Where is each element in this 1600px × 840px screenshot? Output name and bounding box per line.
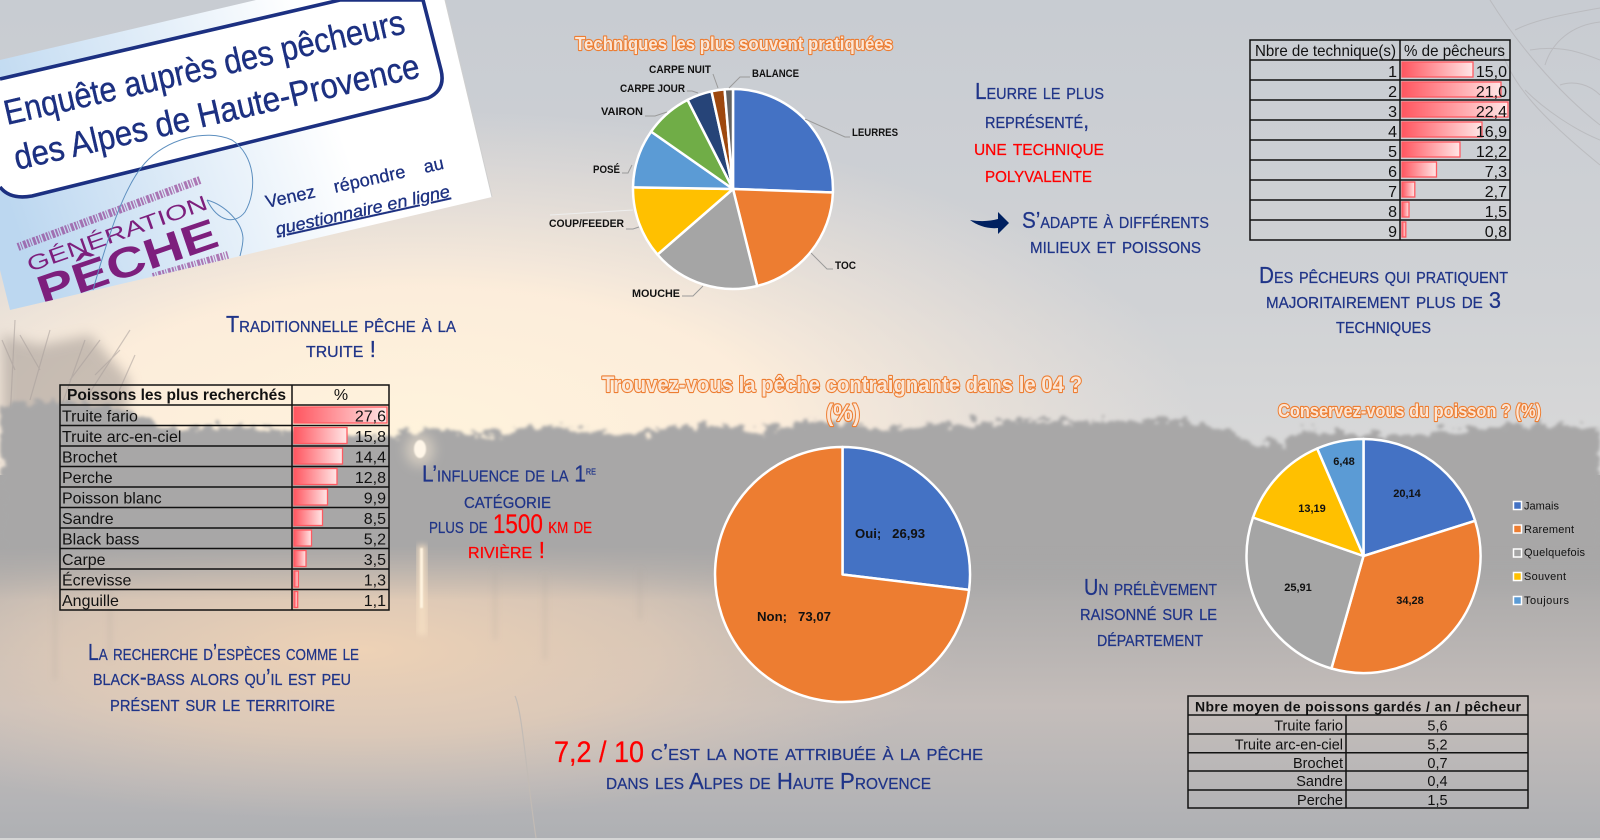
callout: prélèvement <box>1080 574 1217 651</box>
pie chart: conservez: 34,28 <box>1396 595 1424 607</box>
callout: leurre: Leurre le plus <box>975 78 1104 104</box>
callout: s'adapte: S’adapte à différents <box>1022 207 1209 233</box>
table: number of techniques: 2,7 <box>1485 184 1507 201</box>
legend: conservez: Jamais <box>1524 500 1560 512</box>
table: most sought fish: Perche <box>62 470 113 487</box>
callout: s'adapte <box>1022 207 1209 258</box>
table: number of techniques: 21,0 <box>1476 84 1507 101</box>
table: fish kept: Nbre moyen de poissons gardés / an / pêcheur <box>1195 699 1522 715</box>
callout: prélèvement: département <box>1097 625 1203 651</box>
pie chart: conservez: 25,91 <box>1284 582 1312 594</box>
flyer invitation <box>264 153 452 239</box>
pie chart: contraignante <box>715 447 970 702</box>
table: number of techniques: 8 <box>1388 204 1397 221</box>
table: number of techniques: 1,5 <box>1485 204 1507 221</box>
table: fish kept: Truite arc-en-ciel <box>1235 738 1343 754</box>
callout: leurre: une technique <box>974 134 1104 160</box>
table: most sought fish: Anguille <box>62 593 119 610</box>
flyer invitation: questionnaire en ligne <box>274 182 452 239</box>
table: most sought fish: 3,5 <box>364 552 386 569</box>
callout: truite: Traditionnelle pêche à la <box>226 311 456 337</box>
table: most sought fish: 27,6 <box>355 409 386 426</box>
pie chart: techniques: TOC <box>835 260 856 272</box>
table: number of techniques: 0,8 <box>1485 224 1507 241</box>
callout: prélèvement: Un prélèvement <box>1084 574 1217 600</box>
table: most sought fish: Truite fario <box>62 409 138 426</box>
callout: note 7,2 / 10: c’est la note attribuée à la pêche <box>651 739 983 765</box>
table: fish kept: 5,2 <box>1427 738 1448 754</box>
callout: leurre: représenté, <box>985 107 1089 133</box>
legend: conservez: Quelquefois <box>1524 547 1586 559</box>
callout: 1re catégorie: re <box>586 464 596 478</box>
table: fish kept: Brochet <box>1293 756 1343 772</box>
callout: prélèvement: raisonné sur le <box>1080 599 1217 625</box>
callout: note 7,2 / 10: 7,2 / 10 <box>554 736 644 769</box>
callout: leurre: polyvalente <box>985 161 1092 187</box>
table: most sought fish <box>60 385 389 610</box>
pie chart: techniques: VAIRON <box>601 106 643 118</box>
table: most sought fish: 15,8 <box>355 429 386 446</box>
table: number of techniques: 9 <box>1388 224 1397 241</box>
table: fish kept: Truite fario <box>1274 719 1343 735</box>
callout: plus de 3 techniques: majoritairement plus de 3 <box>1266 287 1501 313</box>
logo: Génération Pêche: PÊCHE <box>30 208 224 315</box>
arrow <box>970 212 1009 234</box>
callout: truite <box>226 311 456 362</box>
table: most sought fish: Sandre <box>62 511 114 528</box>
pie chart: techniques: COUP/FEEDER <box>549 218 624 230</box>
table: number of techniques: 1 <box>1388 64 1397 81</box>
table: fish kept <box>1188 696 1528 809</box>
table: most sought fish: 12,8 <box>355 470 386 487</box>
callout: leurre <box>974 78 1104 187</box>
pie chart: contraignante: Oui; 26,93 <box>855 526 925 541</box>
callout: plus de 3 techniques: techniques <box>1336 312 1431 338</box>
callout: black-bass <box>88 639 359 716</box>
pie chart: conservez: 13,19 <box>1298 503 1326 515</box>
flyer title box: des Alpes de Haute-Provence <box>10 47 423 178</box>
pie chart: techniques: MOUCHE <box>632 288 680 300</box>
table: most sought fish: Truite arc-en-ciel <box>62 429 181 446</box>
table: most sought fish: 1,3 <box>364 572 386 590</box>
table: number of techniques: 2 <box>1388 84 1397 101</box>
table: number of techniques: 4 <box>1388 124 1397 141</box>
pie chart: conservez: 6,48 <box>1333 456 1355 468</box>
callout: plus de 3 techniques: Des pêcheurs qui pratiquent <box>1259 262 1508 288</box>
table: fish kept: Perche <box>1297 793 1343 809</box>
table: fish kept: 5,6 <box>1427 719 1448 735</box>
callout: plus de 3 techniques <box>1259 262 1508 338</box>
table: number of techniques: 22,4 <box>1476 104 1507 121</box>
table: most sought fish: Brochet <box>62 450 118 466</box>
pie chart: techniques: CARPE JOUR <box>620 83 685 95</box>
legend: conservez: Toujours <box>1524 595 1570 607</box>
card: survey flyer <box>0 0 492 315</box>
pie chart: contraignante: Non; 73,07 <box>757 609 831 624</box>
table: number of techniques <box>1250 40 1510 241</box>
heading: contraignante: (%) <box>826 400 860 427</box>
callout: 1re catégorie <box>422 460 596 563</box>
table: most sought fish: % <box>334 387 348 404</box>
callout: note 7,2 / 10 <box>554 736 983 794</box>
logo: Génération Pêche: GÉNÉRATION <box>24 192 211 277</box>
pie chart: techniques: CARPE NUIT <box>649 64 711 76</box>
table: most sought fish: 1,1 <box>364 593 386 610</box>
table: most sought fish: Black bass <box>62 532 139 548</box>
table: most sought fish: 8,5 <box>364 511 386 528</box>
pie chart: techniques: POSÉ <box>593 163 620 176</box>
callout: s'adapte: milieux et poissons <box>1030 232 1201 258</box>
table: fish kept: 1,5 <box>1427 793 1448 809</box>
table: most sought fish: Poissons les plus recherchés <box>67 387 286 404</box>
table: most sought fish: Poisson blanc <box>62 490 162 508</box>
table: fish kept: 0,7 <box>1427 756 1448 772</box>
callout: black-bass: présent sur le territoire <box>110 690 335 716</box>
table: most sought fish: Écrevisse <box>62 570 131 590</box>
table: number of techniques: 6 <box>1388 164 1397 181</box>
table: most sought fish: 14,4 <box>355 450 386 466</box>
table: number of techniques: 3 <box>1388 104 1397 121</box>
table: number of techniques: 12,2 <box>1476 144 1507 161</box>
callout: black-bass: black-bass alors qu’il est peu <box>93 664 351 690</box>
callout: 1re catégorie: catégorie <box>464 487 551 513</box>
table: most sought fish: 9,9 <box>364 490 386 508</box>
callout: truite: truite ! <box>306 336 376 362</box>
legend: conservez <box>1514 500 1586 607</box>
table: fish kept: Sandre <box>1296 774 1343 790</box>
table: number of techniques: Nbre de technique(s) <box>1255 43 1396 60</box>
pie chart: conservez <box>1246 439 1481 673</box>
heading: techniques pie: Techniques les plus souvent pratiquées <box>575 34 893 54</box>
flyer invitation: Venez répondre au <box>264 153 446 212</box>
heading: contraignante <box>602 372 1082 427</box>
table: number of techniques: % de pêcheurs <box>1404 43 1505 60</box>
callout: note 7,2 / 10: dans les Alpes de Haute Provence <box>606 768 931 794</box>
callout: black-bass: La recherche d’espèces comme le <box>88 639 359 665</box>
pie chart: conservez: 20,14 <box>1393 488 1422 500</box>
table: number of techniques: 15,0 <box>1476 64 1507 81</box>
table: fish kept: 0,4 <box>1427 774 1448 790</box>
table: number of techniques: 7 <box>1388 184 1397 201</box>
table: number of techniques: 7,3 <box>1485 164 1507 181</box>
pie chart: techniques: LEURRES <box>852 127 898 139</box>
table: most sought fish: 5,2 <box>364 532 386 548</box>
heading: contraignante: Trouvez-vous la pêche contraignante dans le 04 ? <box>602 372 1082 397</box>
pie chart: techniques <box>549 64 898 300</box>
pie chart: techniques: BALANCE <box>752 68 799 80</box>
logo: Génération Pêche <box>18 180 228 315</box>
table: most sought fish: Carpe <box>62 552 106 569</box>
table: number of techniques: 5 <box>1388 144 1397 161</box>
legend: conservez: Souvent <box>1524 571 1566 583</box>
flyer title box <box>0 0 442 197</box>
table: number of techniques: 16,9 <box>1476 124 1507 141</box>
callout: 1re catégorie: rivière ! <box>468 537 545 563</box>
heading: conservez: Conservez-vous du poisson ? (%) <box>1278 401 1541 421</box>
callout: 1re catégorie: plus de 1500 km de <box>429 509 592 539</box>
legend: conservez: Rarement <box>1524 524 1574 536</box>
callout: 1re catégorie: L’influence de la 1 <box>422 460 603 486</box>
